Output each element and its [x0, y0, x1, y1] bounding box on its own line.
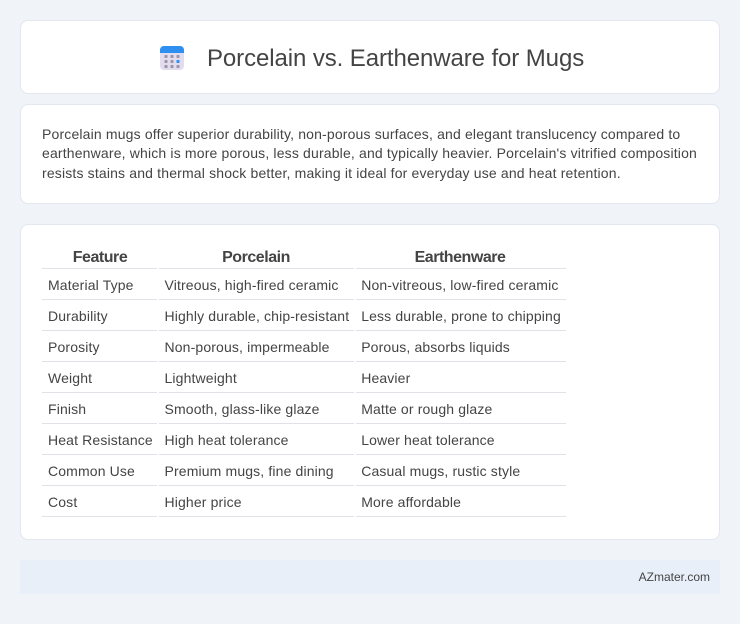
row: weight: Heavier — [361, 370, 410, 386]
text block: summary — [42, 126, 697, 181]
row: common use: Casual mugs, rustic style — [361, 463, 520, 479]
title: Porcelain vs. Earthenware for Mugs — [207, 45, 584, 72]
row: durability: Durability — [48, 308, 108, 324]
row: heat resistance: High heat tolerance — [164, 432, 289, 448]
row: material type — [48, 277, 558, 293]
row: porosity — [48, 339, 510, 355]
footer: source label: AZmater.com — [639, 570, 710, 584]
row: material type: Material Type — [48, 277, 134, 293]
row: porosity: Porosity — [48, 339, 100, 355]
table header — [73, 249, 506, 266]
table header: Porcelain — [222, 249, 290, 266]
row: heat resistance: Lower heat tolerance — [361, 432, 495, 448]
row: durability — [48, 308, 561, 324]
text block: summary: Porcelain mugs offer superior durability, non-porous surfaces, and elegant translucency compared to — [42, 126, 680, 142]
row: common use: Common Use — [48, 463, 135, 479]
row: cost: Higher price — [164, 494, 242, 510]
table header: Feature — [73, 249, 127, 266]
row: weight — [48, 370, 410, 386]
row: heat resistance — [48, 432, 495, 448]
row: finish: Smooth, glass-like glaze — [164, 401, 320, 417]
row: cost: More affordable — [361, 494, 461, 510]
row: porosity: Porous, absorbs liquids — [361, 339, 510, 355]
row: heat resistance: Heat Resistance — [48, 432, 153, 448]
row: durability: Less durable, prone to chipping — [361, 308, 561, 324]
panel: title card — [20, 20, 720, 94]
panel: comparison table — [20, 224, 720, 540]
row: finish: Matte or rough glaze — [361, 401, 492, 417]
panel: summary text — [20, 104, 720, 204]
row: porosity: Non-porous, impermeable — [164, 339, 330, 355]
text block: summary: resists stains and thermal shock better, making it ideal for everyday use and heat retention. — [42, 165, 621, 181]
row: weight: Lightweight — [164, 370, 237, 386]
row: common use — [48, 463, 520, 479]
row: cost — [48, 494, 461, 510]
row: finish: Finish — [48, 401, 86, 417]
row: durability: Highly durable, chip-resistant — [164, 308, 349, 324]
row: common use: Premium mugs, fine dining — [164, 463, 334, 479]
row: material type: Vitreous, high-fired ceramic — [164, 277, 339, 293]
row: material type: Non-vitreous, low-fired ceramic — [361, 277, 558, 293]
icon: calendar — [160, 46, 184, 70]
row: finish — [48, 401, 492, 417]
table: comparison — [42, 249, 566, 517]
table header: Earthenware — [415, 249, 505, 266]
text block: summary: earthenware, which is more porous, less durable, and typically heavier. Porcelain's vitrified composition — [42, 145, 697, 161]
row: cost: Cost — [48, 494, 77, 510]
footer bar — [20, 560, 720, 594]
row: weight: Weight — [48, 370, 92, 386]
